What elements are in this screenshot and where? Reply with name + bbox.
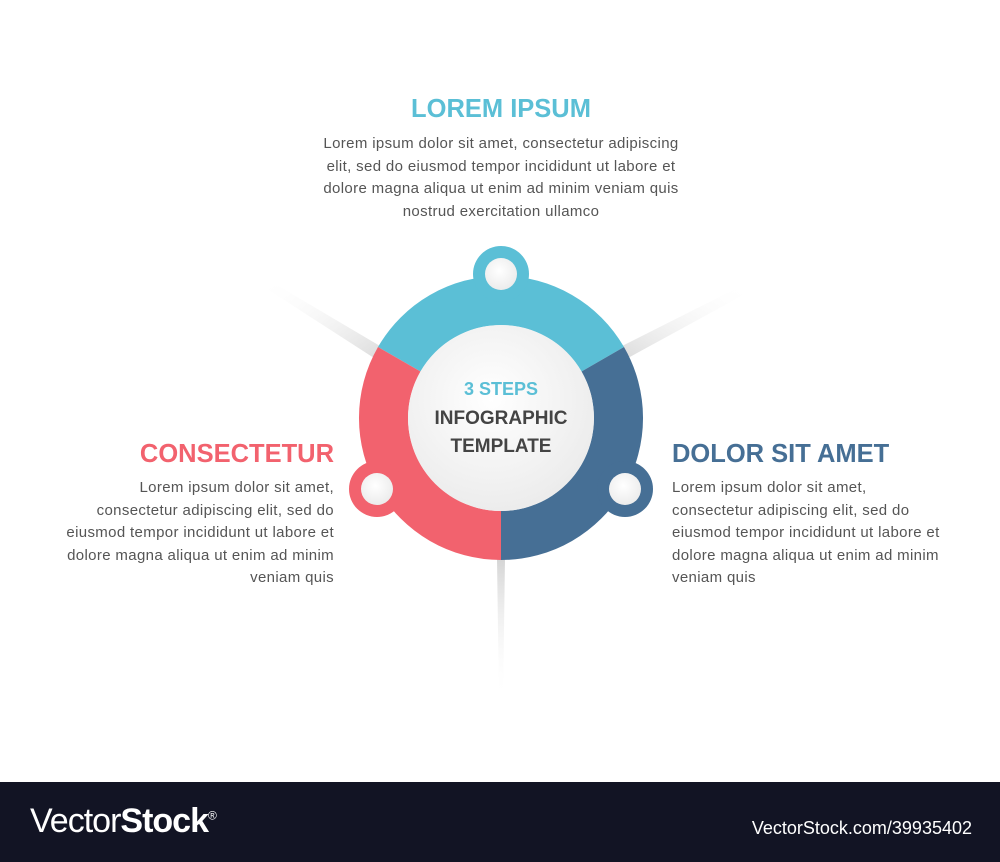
text right: eiusmod tempor incididunt ut labore et: [672, 524, 940, 541]
text left: dolore magna aliqua ut enim ad minim: [67, 546, 334, 564]
center circle: 3 STEPS: [464, 379, 538, 399]
title right: DOLOR SIT AMET: [672, 440, 889, 468]
text right: veniam quis: [672, 569, 756, 586]
segment: blue top: [378, 246, 624, 372]
text top: elit, sed do eiusmod tempor incididunt ut labore et: [327, 158, 675, 174]
segment: dark blue right: [501, 347, 653, 560]
text left: consectetur adipiscing elit, sed do: [97, 502, 334, 518]
text right: Lorem ipsum dolor sit amet,: [672, 479, 867, 496]
knobs: [361, 258, 641, 505]
center circle: INFOGRAPHIC: [434, 408, 568, 429]
text top: nostrud exercitation ullamco: [403, 202, 599, 220]
segment: red left: [349, 347, 501, 560]
text left: eiusmod tempor incididunt ut labore et: [66, 524, 334, 541]
text top: [323, 135, 679, 220]
logo: VectorStock®: [30, 802, 216, 840]
text top: dolore magna aliqua ut enim ad minim veniam quis: [323, 180, 679, 197]
title left: CONSECTETUR: [140, 440, 334, 468]
shadows: [264, 278, 747, 700]
text right: dolore magna aliqua ut enim ad minim: [672, 546, 939, 564]
text right: consectetur adipiscing elit, sed do: [672, 502, 909, 518]
center circle: [408, 325, 594, 511]
text left: [66, 479, 334, 586]
text left: veniam quis: [250, 569, 334, 586]
footer bar: [0, 782, 1000, 862]
title top: LOREM IPSUM: [411, 95, 591, 123]
text top: Lorem ipsum dolor sit amet, consectetur adipiscing: [323, 135, 679, 152]
text left: Lorem ipsum dolor sit amet,: [139, 479, 334, 496]
url: VectorStock.com/39935402: [752, 818, 972, 838]
center circle: TEMPLATE: [451, 436, 551, 457]
text right: [672, 479, 940, 586]
